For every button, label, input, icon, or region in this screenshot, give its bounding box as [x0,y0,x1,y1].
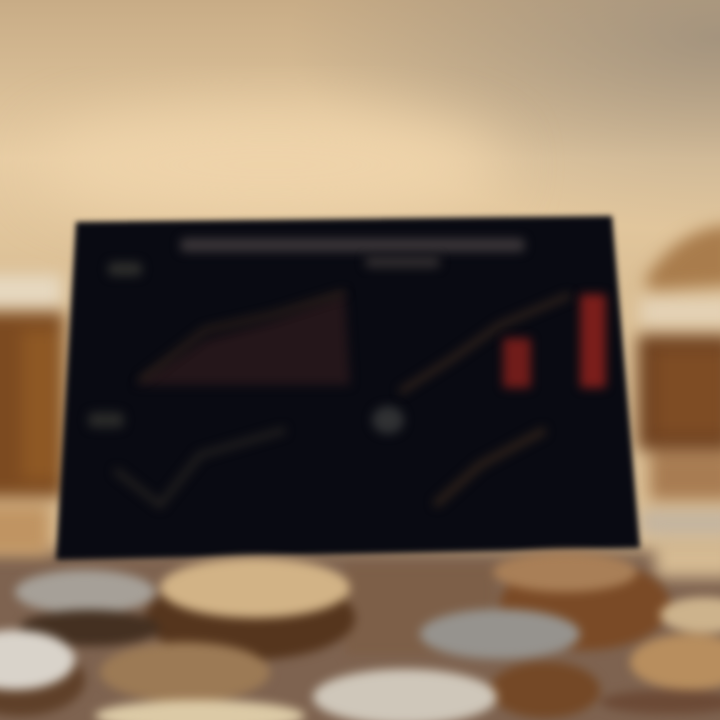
label smear: top left [108,262,142,276]
table surface [0,550,720,720]
coin: bottom left cream [95,700,305,720]
chart: left area chart [135,295,350,385]
chart: left area highlight [140,292,345,380]
biscuit: lower right brown [490,662,600,718]
left cup [0,275,64,555]
panel: dark chart board [56,216,640,560]
chart: lower right line [435,430,545,505]
bar: tall red [580,294,606,388]
title text smear [180,238,525,252]
chart: right line [400,295,570,392]
coin: grey center right [420,609,580,659]
coin stack: center left [145,576,355,660]
biscuit: right edge [630,634,720,690]
label smear: lower left [88,412,124,428]
biscuit: lower left [100,642,270,702]
right cup [638,225,720,578]
coin: left white [0,644,85,716]
coin stack: center right [500,560,670,650]
label smear: lower center [372,406,404,434]
center brown filler [345,565,495,655]
bar: short red [503,338,531,388]
coins and biscuits foreground [0,552,720,720]
subtitle smear [365,256,440,268]
chart: lower left line [115,430,285,505]
coin: far left silver [15,570,155,614]
coin: bottom center white [313,669,497,720]
